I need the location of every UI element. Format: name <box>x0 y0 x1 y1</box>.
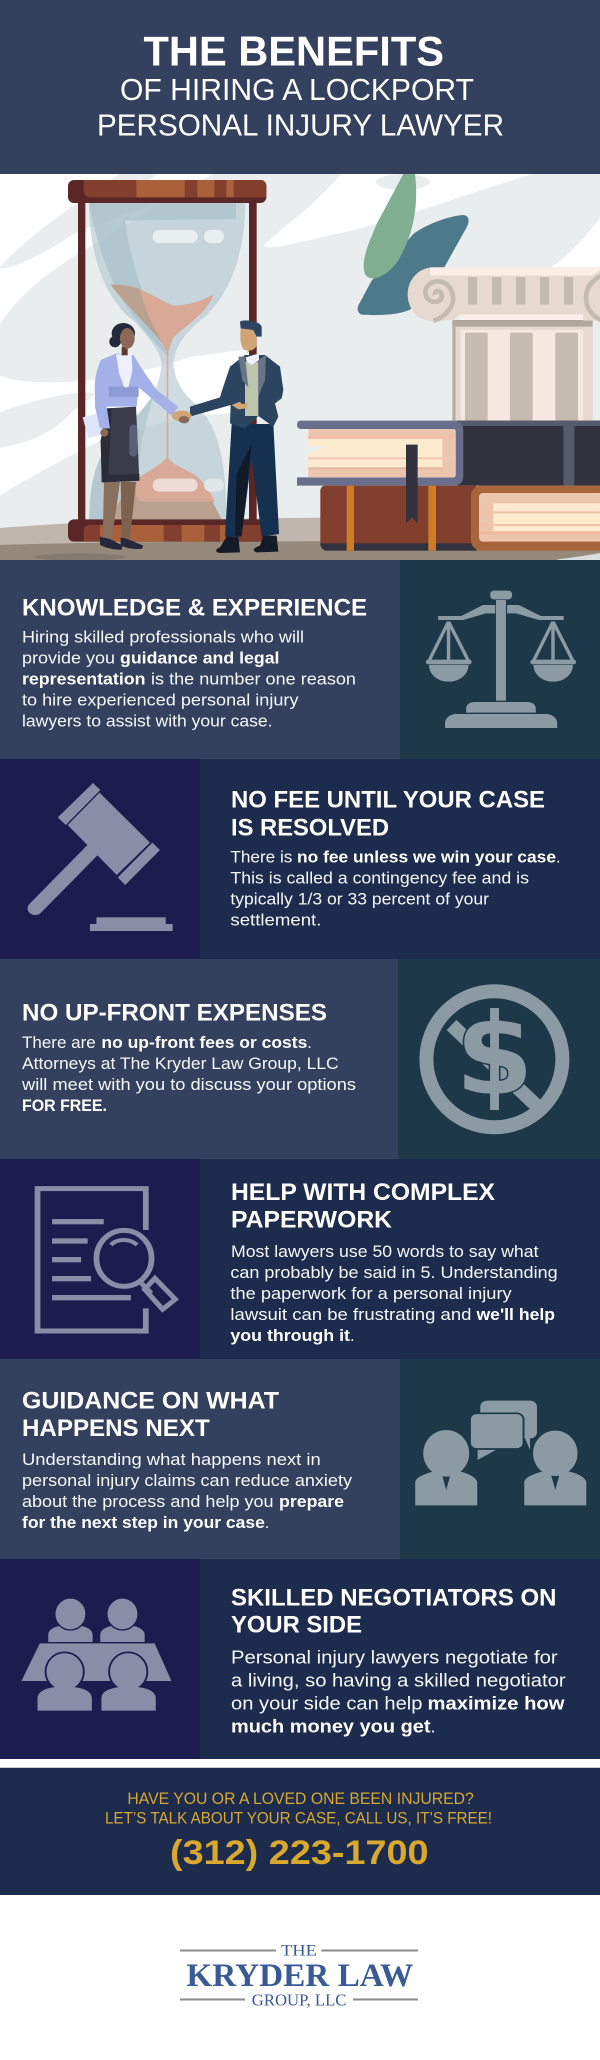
icon: gavel <box>35 783 173 931</box>
panel: help with paperwork <box>0 1159 600 1359</box>
icon: negotiation table <box>21 1598 171 1711</box>
body text: no fee unless we win your case <box>297 848 556 866</box>
bookmark <box>406 445 418 523</box>
body text: . <box>556 848 561 866</box>
body text: will meet with you to discuss your options <box>21 1076 356 1094</box>
body text: about the process and help you <box>22 1493 274 1511</box>
body text: lawsuit can be frustrating and <box>230 1306 472 1324</box>
heading: SKILLED NEGOTIATORS ON <box>231 1585 556 1612</box>
body text: typically 1/3 or 33 percent of your <box>230 890 490 908</box>
body text: representation <box>22 670 146 688</box>
heading <box>231 786 545 841</box>
heading: NO UP-FRONT EXPENSES <box>22 1000 327 1027</box>
body text: no up-front fees or costs <box>101 1034 307 1052</box>
header banner <box>0 0 600 174</box>
heading <box>22 1388 279 1442</box>
icon: crossed-out dollar <box>426 990 562 1127</box>
heading: YOUR SIDE <box>231 1612 362 1639</box>
heading: KNOWLEDGE & EXPERIENCE <box>22 595 367 622</box>
heading: HELP WITH COMPLEX <box>231 1179 495 1206</box>
logo: KRYDER LAW <box>186 1958 413 1994</box>
title: OF HIRING A LOCKPORT <box>120 73 474 107</box>
call to action text: HAVE YOU OR A LOVED ONE BEEN INJURED? <box>127 1790 474 1808</box>
body text <box>22 1451 353 1532</box>
heading <box>231 1585 556 1639</box>
body text: Attorneys at The Kryder Law Group, LLC <box>22 1055 339 1073</box>
body text: There is <box>230 848 292 866</box>
body text: for the next step in your case <box>22 1514 265 1532</box>
body text: . <box>307 1034 312 1052</box>
heading: HAPPENS NEXT <box>22 1415 210 1442</box>
body text: prepare <box>279 1493 344 1511</box>
call to action text: LET’S TALK ABOUT YOUR CASE, CALL US, IT’S FREE! <box>105 1809 492 1827</box>
body text: we'll help <box>475 1306 555 1324</box>
panel: no up-front expenses <box>0 959 600 1159</box>
body text: guidance and legal <box>120 649 280 667</box>
body text: There are <box>22 1034 96 1052</box>
man figure <box>190 320 283 553</box>
body text: This is called a contingency fee and is <box>230 869 529 887</box>
heading <box>231 1179 495 1234</box>
body text <box>230 848 561 929</box>
logo: GROUP, LLC <box>252 1991 346 2010</box>
handshake <box>172 411 192 423</box>
body text: much money you get <box>231 1717 431 1737</box>
body text <box>231 1648 566 1737</box>
logo: THE <box>281 1943 317 1960</box>
black book <box>457 421 600 486</box>
panel: skilled negotiators <box>0 1559 600 1759</box>
logo <box>180 1943 418 2010</box>
heading: IS RESOLVED <box>231 814 389 841</box>
woman figure <box>83 323 178 550</box>
icon: scales of justice <box>426 591 576 728</box>
body text <box>22 628 356 730</box>
heading: GUIDANCE ON WHAT <box>22 1388 279 1415</box>
body text <box>230 1243 558 1345</box>
call to action banner <box>0 1767 600 1895</box>
body text: on your side can help <box>231 1694 422 1714</box>
icon: document with magnifier <box>38 1189 175 1331</box>
body text: is the number one reason <box>151 670 356 688</box>
body text: FOR FREE. <box>22 1097 107 1115</box>
call to action text <box>105 1790 492 1827</box>
body text <box>21 1034 356 1115</box>
body text: you through it <box>230 1327 351 1345</box>
column, plant and books <box>297 174 600 551</box>
title <box>97 28 504 143</box>
body text: Personal injury lawyers negotiate for <box>231 1648 558 1668</box>
body text: maximize how <box>428 1694 566 1714</box>
open book <box>297 421 463 486</box>
icon: crossed-out dollar: $ <box>456 990 533 1120</box>
body text: lawyers to assist with your case. <box>22 712 272 730</box>
body text: a living, so having a skilled negotiator <box>231 1671 566 1691</box>
hero illustration <box>0 174 600 560</box>
body text: personal injury claims can reduce anxiety <box>22 1472 353 1490</box>
hourglass <box>68 180 266 542</box>
phone number: (312) 223-1700 <box>170 1834 429 1872</box>
body text: . <box>265 1514 269 1532</box>
heading: PAPERWORK <box>231 1207 392 1234</box>
body text: to hire experienced personal injury <box>22 691 299 709</box>
body text: the paperwork for a personal injury <box>230 1285 513 1303</box>
column <box>408 267 600 421</box>
title: PERSONAL INJURY LAWYER <box>97 109 504 143</box>
body text: can probably be said in 5. Understanding <box>230 1264 558 1282</box>
icon: two people talking <box>415 1401 586 1505</box>
body text: provide you <box>22 649 115 667</box>
body text: . <box>430 1717 436 1737</box>
panel: guidance on what happens next <box>0 1359 600 1559</box>
lower brown book <box>320 486 600 551</box>
heading: NO FEE UNTIL YOUR CASE <box>231 786 545 813</box>
title: THE BENEFITS <box>144 28 444 74</box>
body text: Hiring skilled professionals who will <box>22 628 304 646</box>
plant leaves <box>358 174 469 315</box>
body text: . <box>350 1327 355 1345</box>
body text: settlement. <box>230 911 321 929</box>
body text: Most lawyers use 50 words to say what <box>231 1243 539 1261</box>
panel: knowledge and experience <box>0 560 600 759</box>
body text: Understanding what happens next in <box>22 1451 321 1469</box>
panel: no fee until resolved <box>0 759 600 959</box>
